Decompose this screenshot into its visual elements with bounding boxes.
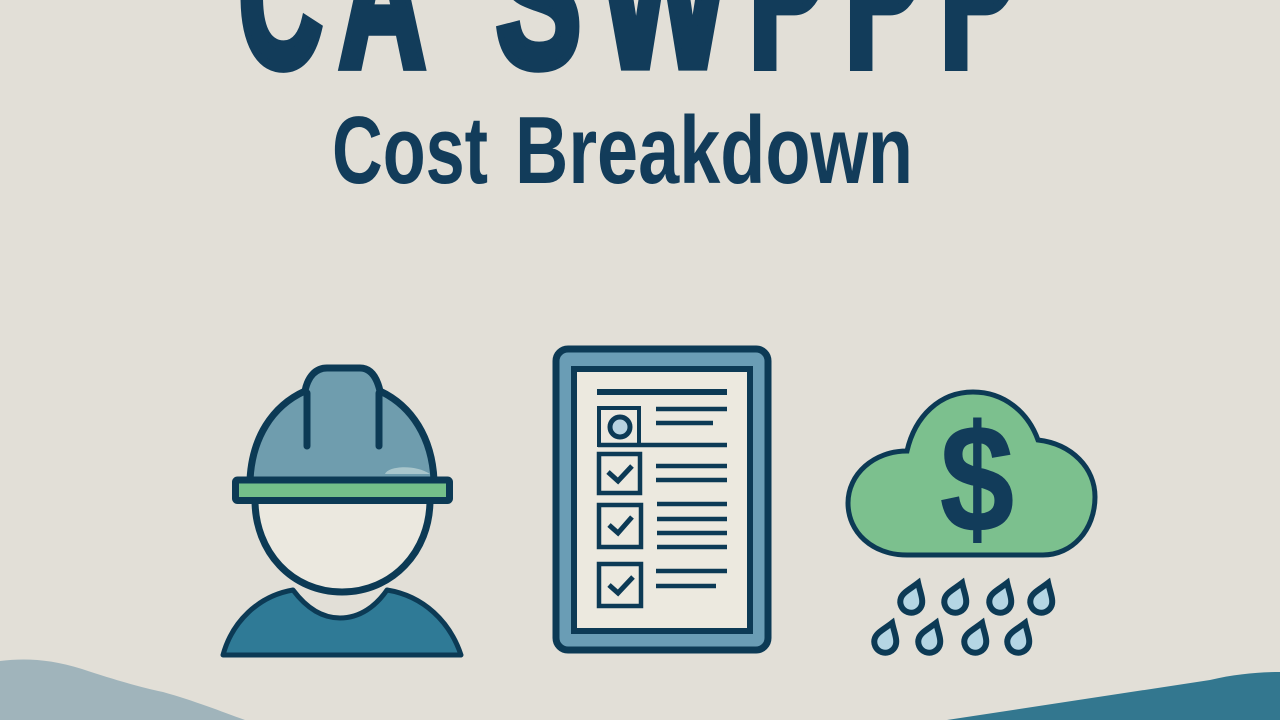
tablet frame — [556, 349, 768, 650]
subtitle: Cost Breakdown: Cost — [332, 97, 488, 204]
worker shoulders — [223, 590, 461, 655]
worker face — [255, 500, 430, 592]
rain drops — [871, 579, 1058, 656]
checklist page — [574, 369, 750, 631]
checklist text lines — [597, 389, 727, 395]
unchecked item — [599, 408, 639, 445]
icon: money cloud with rain — [848, 392, 1095, 656]
right wave — [947, 672, 1280, 720]
hat highlight — [385, 467, 430, 474]
cloud — [848, 392, 1095, 555]
subtitle: Cost Breakdown: Breakdown — [515, 97, 913, 204]
hard hat dome — [250, 368, 434, 480]
left wave — [0, 660, 245, 720]
icon: checklist tablet — [556, 349, 768, 650]
icon: construction worker with hard hat — [223, 368, 461, 655]
title: CA SWPPP — [239, 0, 1019, 115]
subtitle: Cost Breakdown — [332, 97, 913, 204]
hat brim — [236, 480, 450, 500]
hat ridge — [307, 393, 379, 446]
checked items — [599, 454, 641, 606]
dollar sign: $ — [940, 394, 1014, 564]
